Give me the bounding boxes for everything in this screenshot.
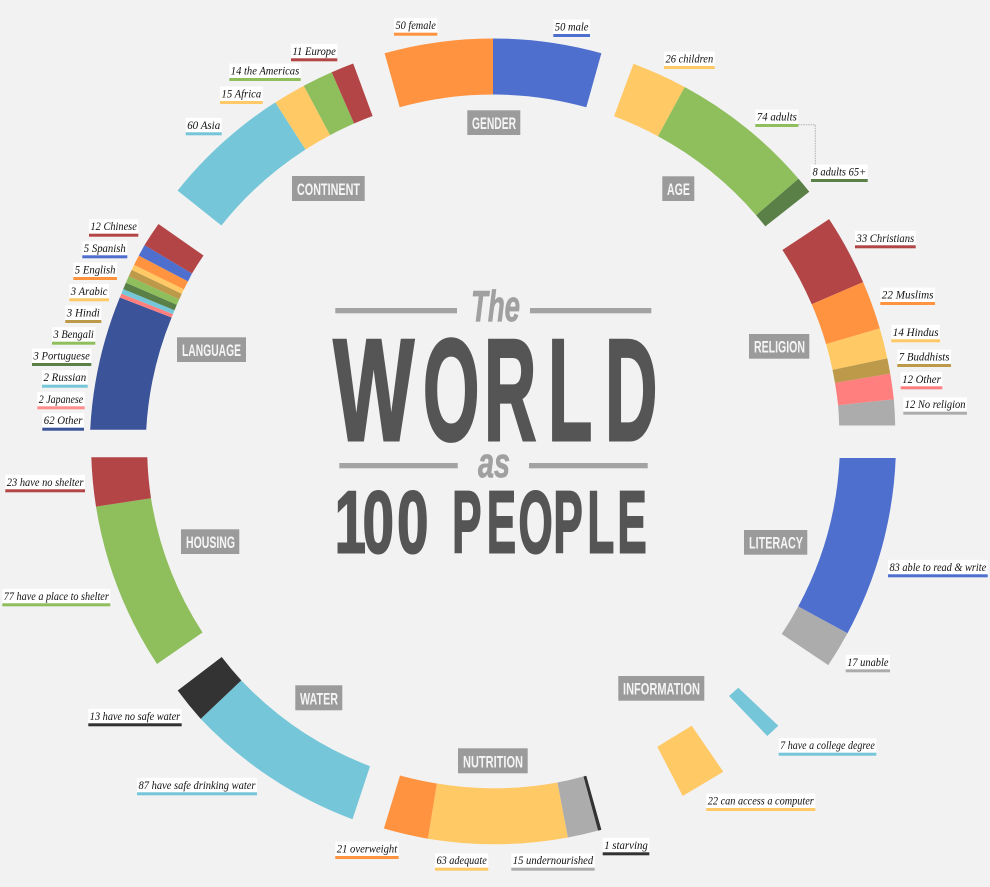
- label: 8 adults 65+: 8 adults 65+: [812, 166, 866, 178]
- title: W: [333, 310, 415, 472]
- segment: 12 No religion: [838, 399, 895, 426]
- segment: 63 adequate: [428, 782, 568, 844]
- label: 17 unable: [846, 655, 890, 672]
- label: 63 adequate: 63 adequate: [436, 855, 487, 867]
- label: 87 have safe drinking water: 87 have safe drinking water: [138, 780, 256, 792]
- label: 2 Russian: [42, 370, 88, 388]
- label: 1 starving: [603, 838, 649, 855]
- panel: information: [618, 676, 876, 811]
- label: 7 have a college degree: [779, 738, 876, 756]
- heading: nutrition: NUTRITION: [463, 752, 523, 771]
- segment: 5 English: [134, 256, 188, 289]
- segment: 21 overweight: [384, 776, 437, 839]
- label: 60 Asia: 60 Asia: [187, 120, 220, 132]
- label: 3 Portuguese: [32, 348, 91, 366]
- label: 60 Asia: [186, 118, 222, 135]
- label: 77 have a place to shelter: 77 have a place to shelter: [4, 591, 109, 603]
- label: 12 No religion: 12 No religion: [905, 399, 966, 411]
- label: 5 Spanish: [82, 241, 127, 258]
- label: 3 Arabic: 3 Arabic: [70, 286, 108, 298]
- title: as: [478, 439, 510, 486]
- label: 62 Other: [42, 413, 84, 431]
- label: 5 English: 5 English: [75, 264, 116, 276]
- segment: 7 Buddhists: [832, 358, 890, 383]
- label: 15 Africa: 15 Africa: [222, 88, 261, 100]
- segment: 50 male: [493, 38, 601, 107]
- panel: continent: [178, 44, 373, 225]
- label: 11 Europe: [291, 44, 337, 61]
- segment: 11 Europe: [332, 64, 373, 124]
- label: 14 the Americas: 14 the Americas: [231, 66, 300, 78]
- label: 7 Buddhists: 7 Buddhists: [899, 352, 950, 364]
- segment: 8 adults 65+: [756, 179, 809, 226]
- label: 15 undernourished: 15 undernourished: [513, 855, 593, 867]
- label: 17 unable: 17 unable: [847, 657, 888, 669]
- panel: literacy: [744, 458, 988, 672]
- label: 50 female: 50 female: [396, 20, 436, 32]
- segment: 87 have safe drinking water: [201, 680, 370, 819]
- label: 2 Japanese: [37, 392, 85, 409]
- label: 7 have a college degree: 7 have a college degree: [780, 740, 875, 752]
- heading: water: WATER: [300, 689, 338, 708]
- heading: information: INFORMATION: [623, 680, 700, 699]
- heading: gender: [467, 110, 520, 135]
- segment: 17 unable: [782, 606, 848, 665]
- heading: continent: [292, 176, 365, 201]
- title: 100: [335, 472, 428, 571]
- segment: 83 able to read and write: [798, 458, 896, 633]
- label: 12 Chinese: 12 Chinese: [90, 221, 137, 233]
- panel: nutrition: [335, 748, 649, 871]
- label: 8 adults 65+: [811, 164, 868, 182]
- label: 12 Other: [901, 372, 942, 389]
- label: 33 Christians: 33 Christians: [856, 233, 915, 245]
- label: 3 Portuguese: 3 Portuguese: [33, 350, 90, 362]
- heading: housing: HOUSING: [186, 533, 235, 552]
- segment: 60 Asia: [178, 102, 306, 226]
- segment: 15 undernourished: [557, 776, 598, 838]
- heading: housing: [181, 529, 239, 554]
- heading: language: [177, 337, 246, 362]
- title: PEOPLE: [452, 473, 647, 571]
- title: [333, 282, 657, 571]
- label: 7 Buddhists: [897, 350, 951, 367]
- segment: 2 Russian: [121, 289, 174, 314]
- panel: religion: [749, 219, 967, 426]
- segment: 2 Japanese: [120, 294, 173, 318]
- heading: gender: GENDER: [472, 114, 516, 133]
- heading: continent: CONTINENT: [297, 180, 360, 199]
- label: 12 No religion: [903, 397, 967, 415]
- label: 3 Bengali: [52, 327, 95, 345]
- segment: 13 have no safe water: [178, 657, 241, 719]
- heading: water: [295, 685, 342, 710]
- heading: language: LANGUAGE: [182, 341, 241, 360]
- label: 77 have a place to shelter: [2, 589, 110, 606]
- segment: 12 Chinese: [144, 224, 204, 274]
- label: 26 children: 26 children: [666, 54, 713, 66]
- label: 11 Europe: 11 Europe: [292, 46, 336, 58]
- heading: age: AGE: [667, 180, 690, 199]
- label: 5 Spanish: 5 Spanish: [84, 243, 126, 255]
- label: 63 adequate: [435, 853, 488, 871]
- segment: 3 Portuguese: [123, 283, 177, 310]
- segment: 74 adults: [658, 87, 798, 215]
- label: 15 undernourished: [511, 853, 595, 871]
- label: 14 Hindus: [891, 325, 940, 342]
- label: 3 Hindi: 3 Hindi: [66, 308, 100, 320]
- segment: 7 have a college degree: [729, 688, 778, 736]
- heading: religion: [749, 334, 809, 359]
- heading: information: [618, 676, 704, 701]
- segment: 50 female: [385, 38, 493, 107]
- label: 23 have no shelter: 23 have no shelter: [7, 477, 84, 489]
- label: 13 have no safe water: 13 have no safe water: [90, 711, 181, 723]
- label: 21 overweight: 21 overweight: [337, 844, 398, 856]
- panel: gender: [385, 18, 601, 135]
- segment: 23 have no shelter: [91, 457, 151, 507]
- connector: adults to adults 65+: [798, 125, 815, 165]
- label: 74 adults: [755, 110, 798, 127]
- heading: literacy: LITERACY: [749, 534, 803, 553]
- label: 12 Other: 12 Other: [902, 374, 941, 386]
- segment: 15 Africa: [275, 86, 330, 150]
- label: 22 can access a computer: [706, 794, 815, 811]
- segment: 22 can access a computer: [657, 726, 723, 796]
- segment: 3 Bengali: [126, 276, 179, 305]
- segment: 22 Muslims: [812, 282, 880, 344]
- heading: age: [662, 176, 694, 201]
- segment: 12 Other: [835, 374, 894, 405]
- segment: 14 Hindus: [826, 328, 887, 370]
- label: 1 starving: 1 starving: [604, 840, 648, 852]
- label: 22 can access a computer: 22 can access a computer: [708, 796, 814, 808]
- panel: age: [614, 52, 868, 226]
- title: The: [471, 282, 520, 331]
- segment: 14 the Americas: [304, 72, 354, 135]
- label: 21 overweight: [335, 842, 399, 859]
- label: 62 Other: 62 Other: [44, 415, 83, 427]
- label: 74 adults: 74 adults: [757, 112, 797, 124]
- label: 5 English: [73, 262, 117, 280]
- segment: 3 Arabic: [132, 265, 184, 294]
- label: 23 have no shelter: [5, 475, 85, 492]
- heading: literacy: [744, 530, 807, 555]
- panel: housing: [2, 457, 239, 664]
- label: 14 the Americas: [229, 64, 301, 81]
- segment: 77 have a place to shelter: [96, 498, 202, 664]
- label: 3 Hindi: [65, 306, 101, 323]
- heading: religion: RELIGION: [754, 338, 805, 357]
- title: ORLD: [423, 310, 657, 472]
- panel: water: [88, 657, 370, 819]
- heading: nutrition: [458, 748, 528, 773]
- panel: language: [32, 219, 246, 431]
- label: 33 Christians: [855, 231, 916, 248]
- label: 87 have safe drinking water: [137, 778, 257, 795]
- label: 50 female: [394, 18, 437, 36]
- segment: 3 Hindi: [129, 270, 182, 299]
- label: 50 male: 50 male: [555, 22, 588, 34]
- label: 15 Africa: [220, 86, 263, 104]
- label: 14 Hindus: 14 Hindus: [893, 327, 939, 339]
- label: 22 Muslims: 22 Muslims: [882, 290, 934, 302]
- segment: 5 Spanish: [139, 245, 192, 281]
- segment: 62 Other: [90, 298, 172, 430]
- label: 13 have no safe water: [88, 709, 182, 726]
- label: 22 Muslims: [880, 288, 935, 305]
- label: 26 children: [664, 52, 715, 69]
- label: 12 Chinese: [89, 219, 138, 237]
- label: 3 Bengali: 3 Bengali: [53, 329, 94, 341]
- label: 3 Arabic: [69, 284, 109, 301]
- segment: 1 starving: [583, 776, 601, 831]
- label: 2 Japanese: 2 Japanese: [39, 394, 83, 406]
- label: 83 able to read and write: [888, 560, 988, 577]
- label: 50 male: [553, 20, 590, 37]
- segment: 26 children: [614, 64, 685, 136]
- label: 2 Russian: 2 Russian: [44, 372, 86, 384]
- segment: 33 Christians: [782, 219, 863, 304]
